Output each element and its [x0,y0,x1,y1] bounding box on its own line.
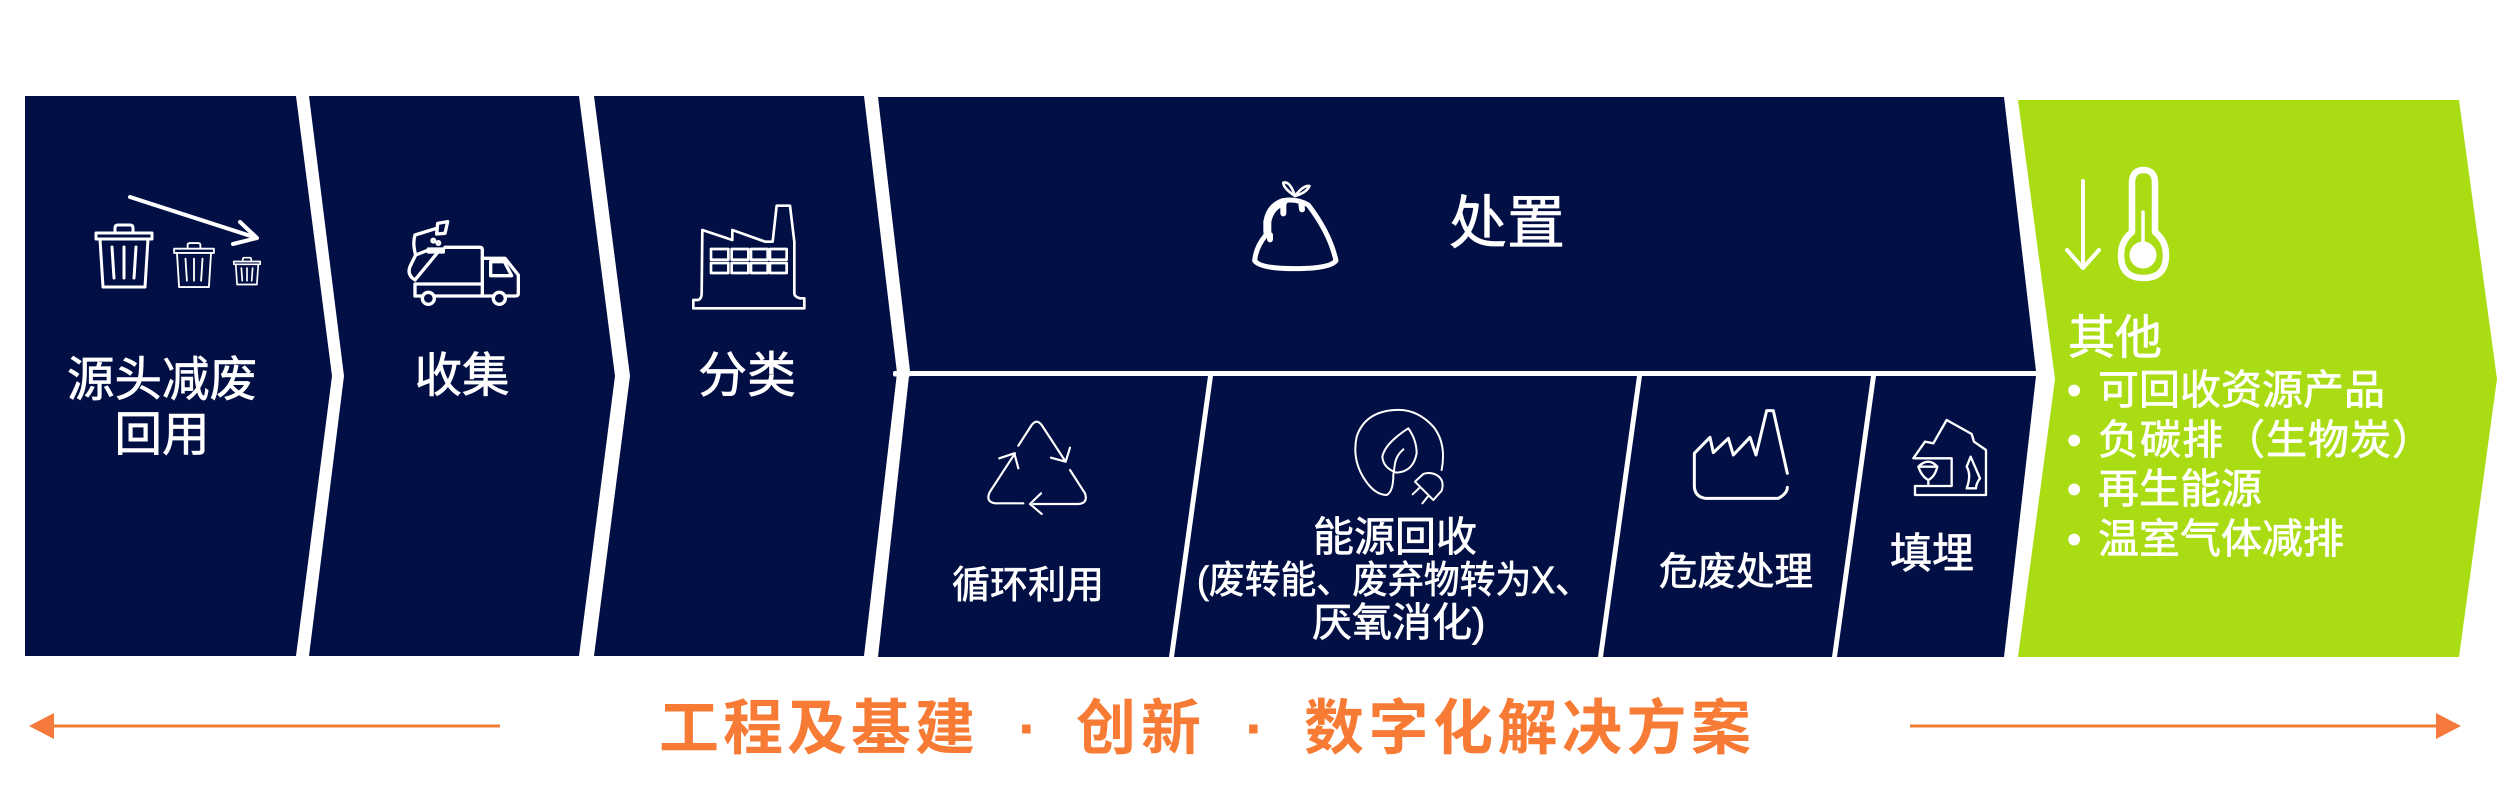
list: other outcomes: • [2067,516,2081,562]
label: source reduction: 源头减废 [67,354,257,407]
label: energy recovery details: (废转能、废弃物转为X、 [1197,560,1591,602]
arrow: right [1910,713,2461,739]
panel: source reduction [25,96,332,656]
label: recycling: 循环利用 [952,565,1104,607]
banner: enablers: 创新 [1076,695,1201,762]
panel: disposal [878,97,2036,657]
banner: enablers: 工程及基建 [659,695,975,762]
list: other outcomes: • [2067,417,2081,463]
icon: falling temperature [2067,170,2166,278]
icon: shrinking trash bins with arrow [96,197,260,287]
icon: hazardous waste factory [1694,411,1787,498]
panel: other [2018,100,2497,657]
banner: enablers: · [1245,695,1265,762]
list: other outcomes: 负碳排（生物炭） [2098,417,2434,463]
list: other outcomes: 温室气体减排 [2098,516,2344,562]
heading: disposal: 处置 [1449,191,1565,256]
label: hazardous waste treatment: 危废处理 [1659,551,1813,594]
label: source reduction: 回用 [114,409,210,462]
heading: other: 其他 [2068,311,2162,364]
list: other outcomes: • [2067,367,2081,413]
icon: garbage bag [1255,182,1336,269]
label: energy recovery: 能源回收 [1313,514,1477,560]
icon: factory [693,206,804,308]
icon: landfill [1913,420,1986,495]
list: other outcomes: • [2067,466,2081,512]
arrow: left [29,713,500,739]
icon: recycling triangle [988,422,1086,514]
banner: enablers: · [1018,695,1038,762]
banner: enablers [659,695,1751,762]
label: sorting: 分类 [698,349,796,403]
list: other outcomes: 再生能源 [2098,466,2262,512]
label: collection: 收集 [414,350,510,403]
icon: leaf and plug [1355,410,1443,503]
label: energy recovery details: 厌氧消化) [1312,601,1485,645]
label: landfill: 填埋 [1890,530,1974,577]
list: other outcomes: 可回收资源产品 [2098,367,2385,413]
panel: sorting [594,96,897,656]
banner: enablers: 数字化解决方案 [1304,695,1751,762]
icon: garbage truck [409,222,518,304]
panel: collection [309,96,615,656]
